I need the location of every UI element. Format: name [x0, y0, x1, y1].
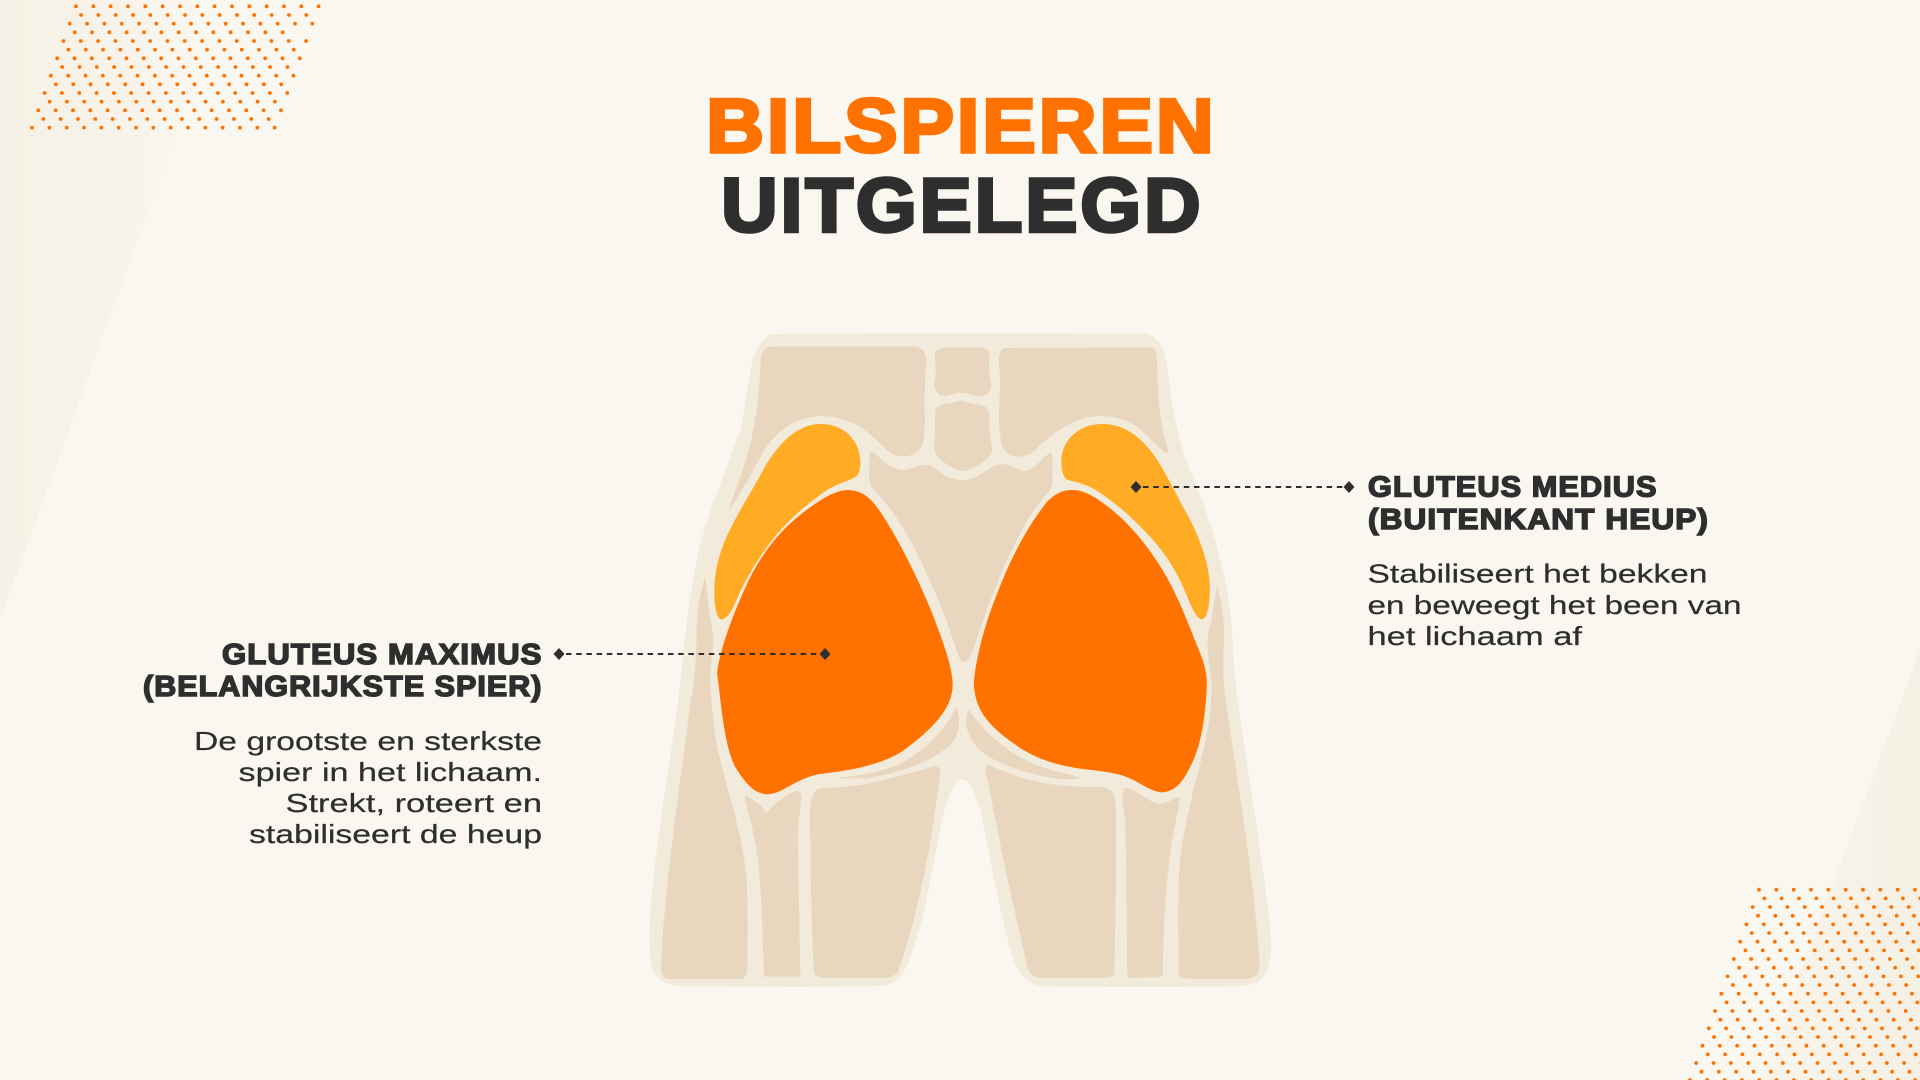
- sacrum panel: [869, 452, 1053, 662]
- gluteus medius right: [1061, 424, 1210, 619]
- dot pattern: top left: [32, 6, 319, 128]
- gluteus maximus left: [717, 490, 953, 794]
- leg: inner left big: [810, 766, 940, 978]
- description: gluteus maximus: stabiliseert de heup: [249, 819, 542, 849]
- description: gluteus medius: [1368, 559, 1742, 651]
- heading: gluteus medius: GLUTEUS MEDIUS: [1368, 472, 1658, 504]
- description: gluteus medius: en beweegt het been van: [1368, 590, 1742, 620]
- spine: upper vertebra: [934, 347, 991, 396]
- spine: lower vertebra: [934, 401, 992, 471]
- background shape: top left: [0, 0, 225, 620]
- leg: inner right big: [986, 765, 1116, 978]
- muscle: top left: [729, 347, 927, 509]
- title line 1: BILSPIEREN: [706, 84, 1217, 169]
- heading: gluteus medius: (BUITENKANT HEUP): [1368, 504, 1709, 536]
- gluteus medius left: [714, 424, 860, 619]
- gluteus maximus right: [974, 490, 1207, 792]
- leg: inner right small: [1123, 788, 1179, 978]
- anatomy illustration: gluteal muscles: [649, 333, 1271, 987]
- description: gluteus medius: Stabiliseert het bekken: [1368, 559, 1708, 589]
- leg: outer right: [1178, 586, 1260, 979]
- description: gluteus maximus: Strekt, roteert en: [286, 788, 542, 818]
- muscle: top right: [999, 347, 1169, 457]
- label: gluteus medius: [1368, 472, 1742, 651]
- callout leader: gluteus maximus: [554, 648, 830, 660]
- heading: gluteus maximus: GLUTEUS MAXIMUS: [222, 639, 542, 671]
- heading: gluteus maximus: (BELANGRIJKSTE SPIER): [143, 671, 542, 703]
- description: gluteus medius: het lichaam af: [1368, 621, 1583, 651]
- callout leader: gluteus medius: [1130, 481, 1354, 493]
- title: [706, 84, 1217, 248]
- background shape: bottom right: [1760, 650, 1920, 1080]
- heading: gluteus maximus: [143, 639, 542, 703]
- description: gluteus maximus: spier in het lichaam.: [238, 757, 542, 787]
- sliver left: [839, 707, 959, 778]
- description: gluteus maximus: [194, 726, 542, 849]
- leg: outer left: [661, 577, 748, 979]
- dot pattern: bottom right: [1690, 890, 1920, 1080]
- heading: gluteus medius: [1368, 472, 1709, 536]
- sliver right: [966, 710, 1083, 779]
- body silhouette: [649, 333, 1271, 987]
- label: gluteus maximus: [143, 639, 542, 849]
- leg: inner left small: [745, 791, 801, 977]
- description: gluteus maximus: De grootste en sterkste: [194, 726, 542, 756]
- title line 2: UITGELEGD: [721, 164, 1203, 248]
